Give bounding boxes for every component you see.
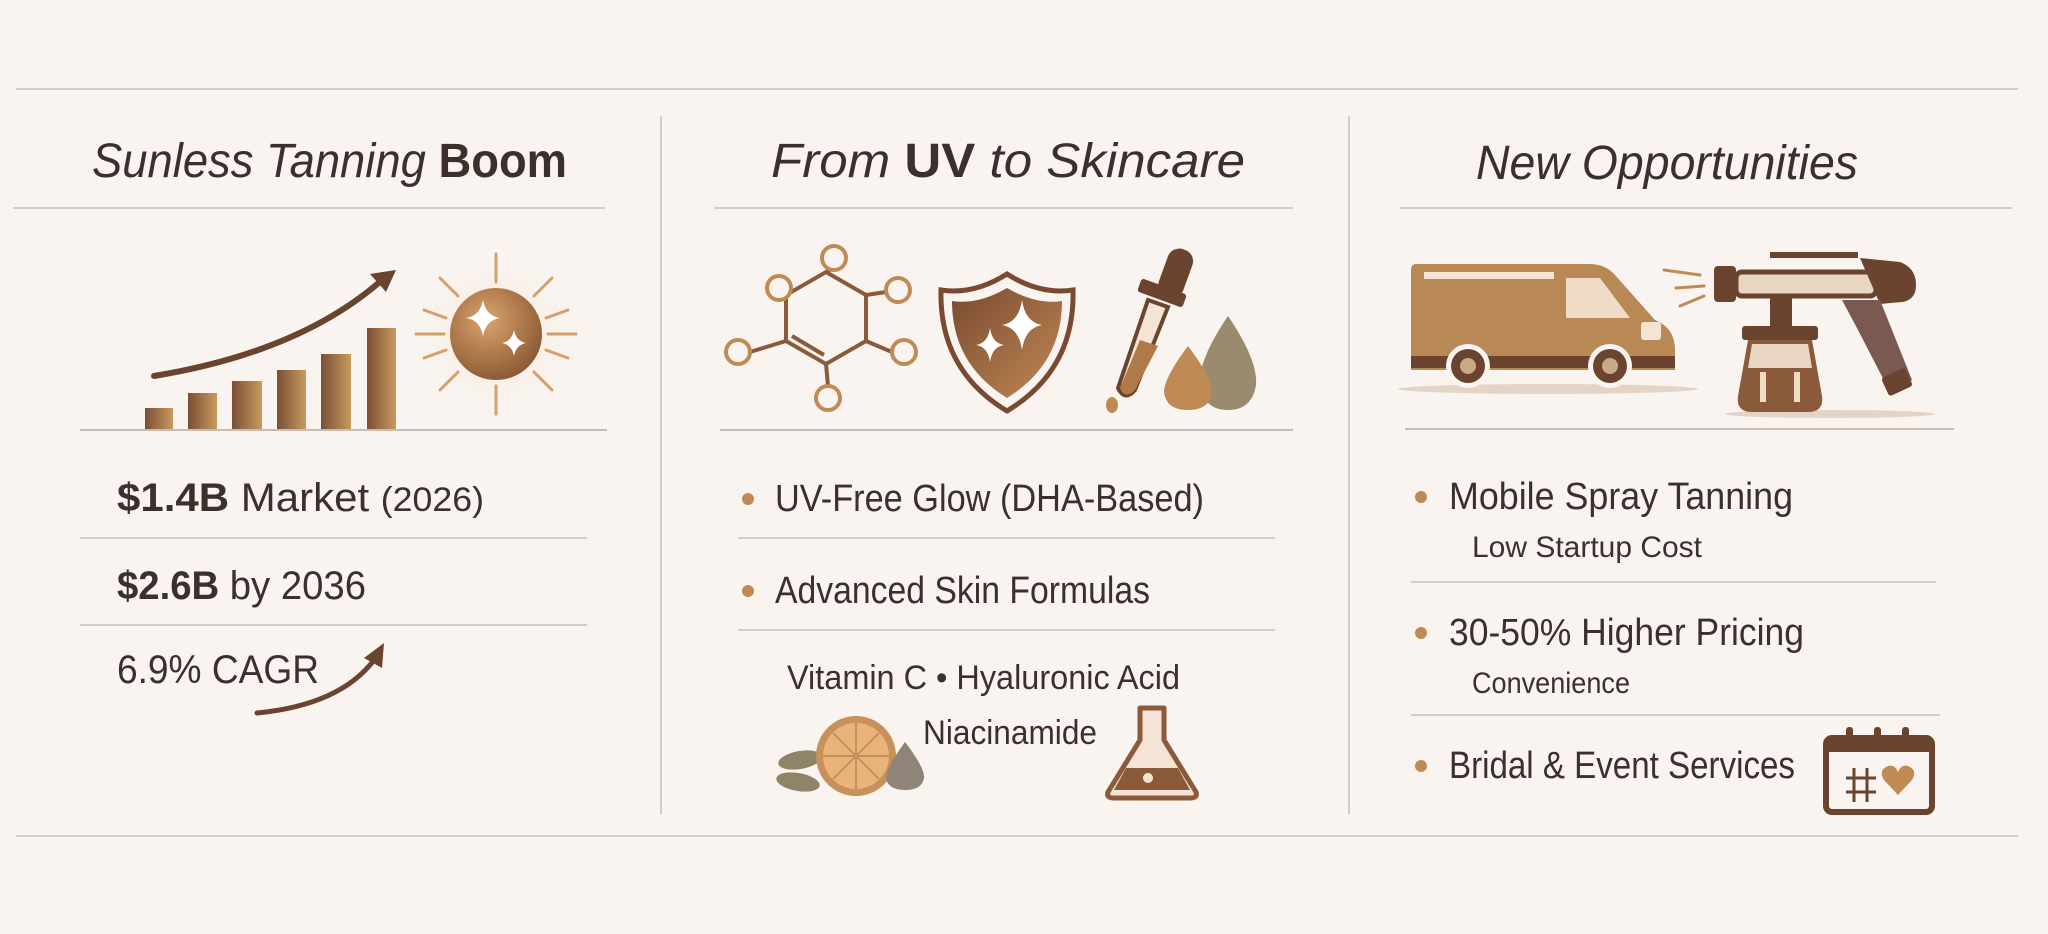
icon: dropper and drops [1106, 245, 1256, 413]
icon: flask [1108, 708, 1196, 798]
text: ingredients: Niacinamide [923, 714, 1097, 752]
icon: molecule [726, 246, 916, 410]
bullet: higher pricing: 30-50% Higher Pricing [1449, 612, 1804, 654]
bullet: bridal & event services: Bridal & Event Services [1449, 745, 1795, 787]
bullet: UV-Free Glow: UV-Free Glow (DHA-Based) [775, 478, 1204, 520]
bullet: higher pricing [1415, 612, 1804, 700]
icon: orange with leaves and drop [775, 716, 924, 796]
panel: sunless tanning boom [13, 135, 607, 713]
icon: sun [416, 254, 576, 414]
stat: 6.9% CAGR: 6.9% CAGR [117, 648, 319, 692]
icon: calendar [1826, 727, 1932, 812]
icon: shield [941, 274, 1073, 411]
stat: $1.4B market: $1.4B Market (2026) [117, 476, 484, 520]
bullet: higher pricing: Convenience [1472, 667, 1630, 700]
bullet: Mobile Spray Tanning [1415, 476, 1793, 564]
panel: new opportunities [1398, 137, 2012, 812]
heading: From UV to Skincare: From UV to Skincare [771, 135, 1245, 188]
text: ingredients: Vitamin C • Hyaluronic Acid [787, 659, 1180, 697]
panel: from UV to skincare [714, 135, 1293, 798]
stat: $2.6B by 2036: $2.6B by 2036 [117, 564, 366, 608]
bar chart with growth arrow [80, 270, 607, 430]
bullet: Advanced Skin Formulas: Advanced Skin Formulas [775, 570, 1150, 612]
heading: Sunless Tanning Boom: Sunless Tanning Boom [92, 135, 567, 188]
icon: CAGR arrow [257, 643, 384, 713]
icon: van [1398, 264, 1698, 394]
icon: spray gun [1664, 252, 1935, 418]
text: ingredients [787, 659, 1180, 752]
heading: New Opportunities: New Opportunities [1476, 137, 1858, 190]
bullet: Mobile Spray Tanning: Mobile Spray Tanning [1449, 476, 1793, 518]
bullet: Mobile Spray Tanning: Low Startup Cost [1472, 531, 1703, 564]
